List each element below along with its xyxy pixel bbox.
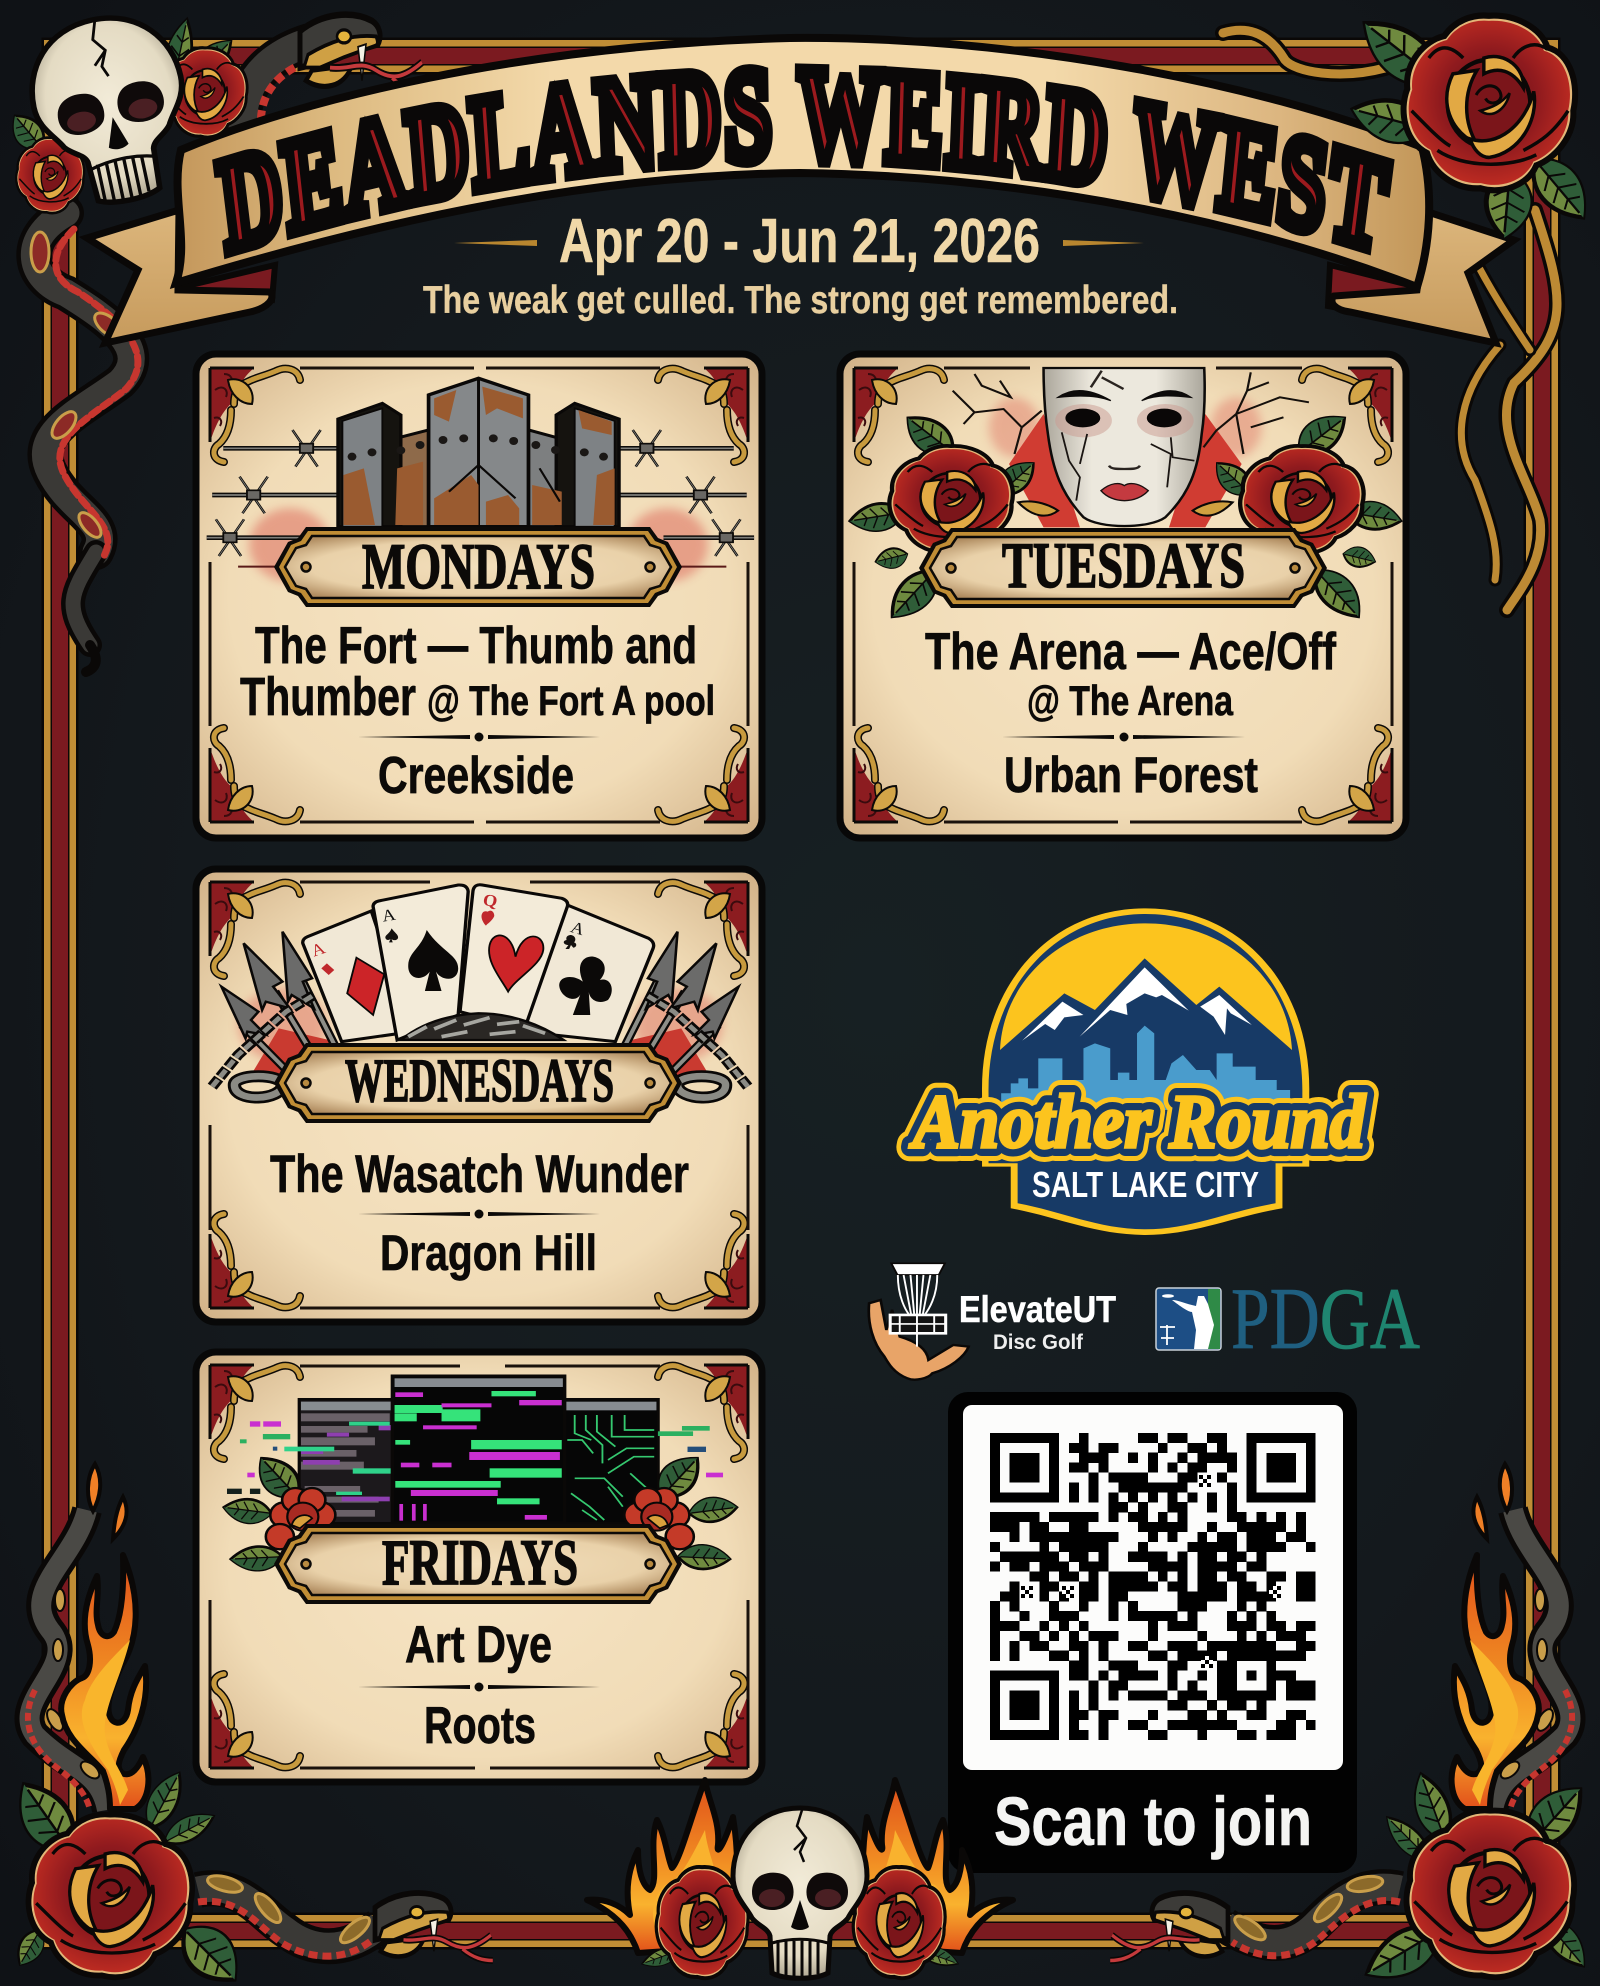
QR code	[990, 1438, 1316, 1735]
script wordmark inner outline: Another Round	[909, 1080, 1366, 1164]
right gold vines	[1223, 30, 1557, 610]
plaque	[274, 1524, 682, 1604]
top-left snake	[243, 15, 424, 170]
date rule left	[454, 240, 537, 246]
top-left skull	[19, 4, 204, 215]
left flame and snake	[28, 1464, 148, 1810]
card: Wednesdays	[196, 869, 762, 1322]
right tail	[1328, 212, 1514, 343]
course: Creekside	[378, 747, 574, 805]
PDGA wordmark: PDGA	[1231, 1271, 1420, 1368]
card: Fridays	[196, 1352, 762, 1782]
logo: ElevateUT Disc Golf	[869, 1263, 1116, 1380]
event venue: @ The Arena	[1027, 677, 1234, 724]
top-right rose	[1404, 15, 1575, 190]
plaque	[274, 1043, 682, 1123]
logo: Another Round Salt Lake City	[909, 908, 1366, 1235]
illustration: playing cards, spears and chains: A	[380, 905, 397, 925]
city name: SALT LAKE CITY	[1032, 1164, 1259, 1205]
day label: TUESDAYS	[1002, 530, 1245, 602]
plaque	[274, 527, 682, 607]
event line: Art Dye	[405, 1616, 552, 1674]
title: DEADLANDS WEIRD WEST	[212, 63, 1395, 260]
course: Urban Forest	[1004, 747, 1258, 803]
left snake	[31, 213, 138, 672]
bottom centre rose left	[640, 1867, 748, 1978]
day label: MONDAYS	[362, 531, 595, 603]
bottom centre rose right	[853, 1867, 960, 1978]
divider	[358, 735, 600, 739]
event line 2: Thumber	[240, 667, 416, 727]
small left rose	[16, 138, 84, 213]
event line: The Arena — Ace/Off	[925, 623, 1337, 681]
right flame and snake	[1452, 1464, 1572, 1810]
logo: PDGA	[1156, 1271, 1420, 1368]
divider	[1002, 735, 1245, 739]
illustration: rusted fort and barbed wire	[207, 378, 754, 582]
card: Mondays	[196, 354, 762, 838]
script wordmark: Another Round	[909, 1080, 1366, 1164]
illustration: glitched screens and flowers	[222, 1376, 739, 1571]
tagline: The weak get culled. The strong get remembered.	[423, 279, 1178, 322]
bottom skull	[733, 1808, 867, 1978]
bottom-right rose	[1407, 1810, 1574, 1977]
date: Apr 20 - Jun 21, 2026	[559, 207, 1040, 276]
divider	[358, 1685, 600, 1689]
left tail	[87, 210, 275, 343]
illustration: playing cards, spears and chains	[212, 885, 748, 1098]
date rule right	[1063, 240, 1144, 246]
QR code panel	[948, 1392, 1357, 1873]
illustration: playing cards, spears and chains: Q	[482, 890, 499, 911]
bottom-left rose	[29, 1814, 192, 1977]
illustration: cracked mask and roses	[848, 368, 1403, 627]
ribbon banner	[79, 34, 1522, 348]
plaque	[919, 528, 1327, 608]
bottom snakes	[198, 1873, 1400, 1960]
event line: The Wasatch Wunder	[270, 1145, 689, 1204]
course: Roots	[424, 1697, 536, 1755]
day label: FRIDAYS	[382, 1527, 578, 1599]
scan caption: Scan to join	[994, 1783, 1312, 1860]
bottom centre flames	[587, 1780, 1013, 1953]
bottom-right leaves	[1357, 1769, 1594, 1986]
ElevateUT text: ElevateUT	[959, 1289, 1116, 1330]
illustration: playing cards, spears and chains: A	[568, 917, 588, 939]
card: Tuesdays	[840, 354, 1406, 838]
divider	[358, 1212, 600, 1216]
day label: WEDNESDAYS	[345, 1048, 614, 1115]
illustration: playing cards, spears and chains: A	[308, 938, 328, 960]
bottom-left leaves	[5, 1767, 251, 1986]
main band	[176, 38, 1429, 287]
event line 1: The Fort — Thumb and	[255, 617, 697, 675]
course: Dragon Hill	[380, 1225, 597, 1281]
script wordmark outline: Another Round	[909, 1080, 1366, 1164]
top-right leaves	[1347, 7, 1599, 240]
event venue: @ The Fort A pool	[427, 677, 715, 724]
top-left leaves	[4, 17, 239, 157]
Disc Golf text: Disc Golf	[993, 1331, 1084, 1354]
top-left rose	[163, 48, 247, 137]
